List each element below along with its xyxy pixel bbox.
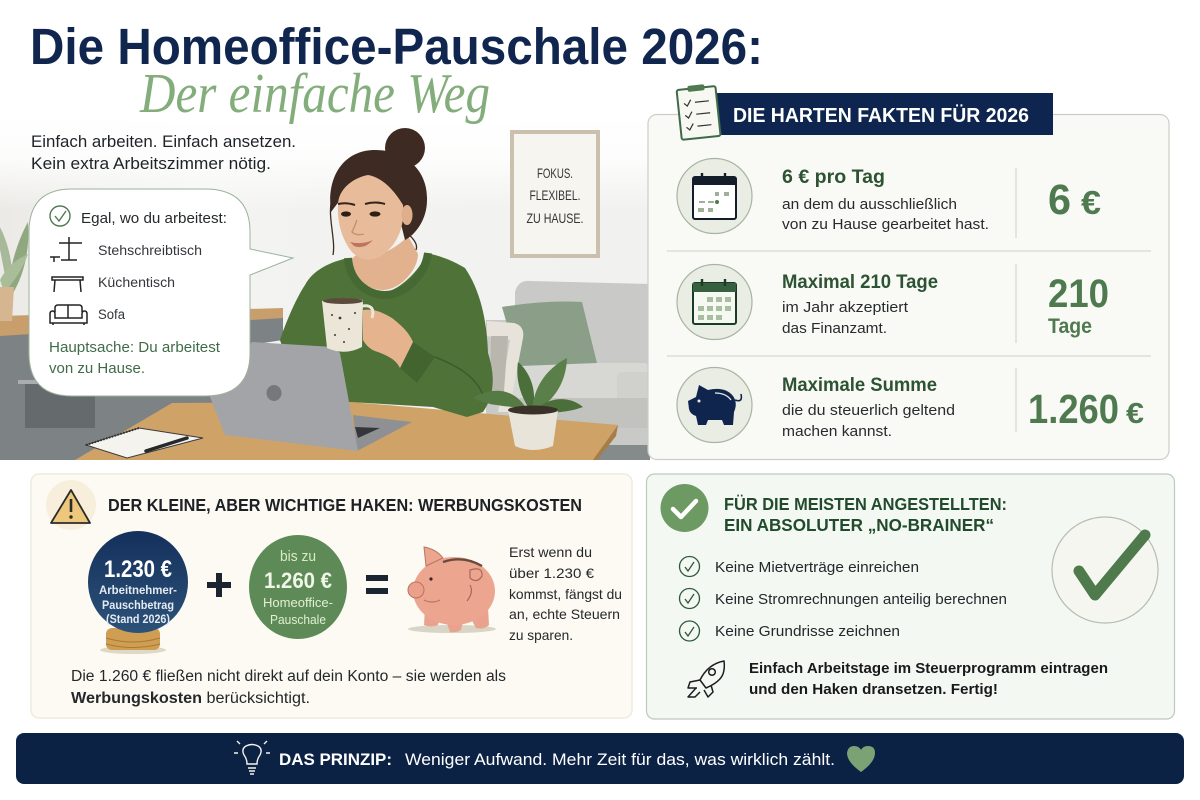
- text: when you save: zu sparen.: [509, 627, 573, 643]
- text: when you save: kommst, fängst du: [509, 586, 622, 602]
- value: 210 days: 210: [1048, 272, 1109, 316]
- value: 1.260 euro: 1.260: [1028, 386, 1119, 432]
- speech bubble: wherever you work: [29, 189, 293, 396]
- value: 210 days: Tage: [1048, 315, 1092, 338]
- call to action: Einfach Arbeitstage im Steuerprogramm eintragen: [749, 661, 1108, 677]
- footer banner: Weniger Aufwand. Mehr Zeit für das, was wirklich zählt.: [405, 751, 835, 769]
- row: maximum 210 days: [677, 264, 1109, 340]
- text: when you save: Erst wenn du: [509, 544, 592, 560]
- row: 6 euro per day: an dem du ausschließlich: [782, 196, 957, 213]
- chair: [487, 321, 523, 412]
- note: Werbungskosten berücksichtigt.: [71, 690, 310, 707]
- title: Die Homeoffice-Pauschale 2026:: [30, 18, 763, 75]
- circle: home office allowance: Homeoffice-: [263, 596, 333, 610]
- icon: large check mark: [1052, 517, 1158, 623]
- row: maximum sum: machen kannst.: [782, 423, 892, 440]
- icon: green calendar: [677, 264, 752, 340]
- bubble conclusion: Hauptsache: Du arbeitest: [49, 340, 220, 356]
- footer banner: DAS PRINZIP:: [279, 751, 392, 769]
- wall poster: FLEXIBEL.: [530, 187, 580, 203]
- subtitle: Der einfache Weg: [139, 63, 490, 125]
- note: [71, 668, 506, 707]
- collar: [348, 253, 428, 295]
- panel: hard facts: [648, 83, 1169, 460]
- circle: employee allowance: (Stand 2026): [106, 614, 170, 626]
- row: 6 euro per day: [677, 158, 1101, 234]
- icon: kitchen table: [52, 277, 83, 292]
- equals sign: [366, 578, 388, 591]
- neck: [350, 236, 418, 290]
- checklist: [680, 556, 1007, 641]
- circle: home office allowance: bis zu: [280, 549, 316, 565]
- row: 6 euro per day: von zu Hause gearbeitet hast.: [782, 216, 989, 233]
- wall poster: FOKUS.: [537, 165, 573, 181]
- text: when you save: [509, 544, 622, 643]
- icon: coins: [100, 628, 166, 654]
- text: when you save: an, echte Steuern: [509, 606, 620, 622]
- speech bubble: wherever you work: Egal, wo du arbeitest:: [81, 211, 227, 227]
- icon: pink piggy bank: [408, 547, 496, 633]
- hand and mug: [322, 298, 413, 368]
- hair: [330, 128, 427, 255]
- kitchen counter: [0, 308, 283, 460]
- icon: clipboard: [676, 83, 721, 140]
- call to action: [749, 661, 1108, 698]
- value: 6 euro: €: [1081, 184, 1101, 221]
- row: maximum sum: Maximale Summe: [782, 375, 937, 396]
- intro text: Kein extra Arbeitszimmer nötig.: [31, 155, 271, 173]
- icon: navy piggy bank: [677, 368, 752, 442]
- wall poster: ZU HAUSE.: [526, 210, 584, 226]
- intro text: [31, 133, 296, 173]
- row: 6 euro per day: 6 € pro Tag: [782, 167, 885, 188]
- icon: rocket: [688, 661, 724, 697]
- circle: home office allowance: 1.260 €: [264, 568, 332, 593]
- sweater: [280, 253, 493, 417]
- icon: sofa: [50, 305, 87, 325]
- row: maximum 210 days: Maximal 210 Tage: [782, 272, 938, 293]
- notebook and pen: [86, 428, 203, 458]
- icon: heart: [847, 746, 875, 772]
- value: 210 days: [1048, 272, 1109, 338]
- heading: EIN ABSOLUTER „NO-BRAINER“: [724, 515, 994, 535]
- bubble conclusion: [49, 340, 220, 377]
- circle: home office allowance: [249, 535, 347, 639]
- circle: employee allowance: Pauschbetrag: [102, 600, 174, 612]
- laptop: [210, 342, 412, 451]
- potted plant: [473, 358, 583, 450]
- illustration: woman working at home: [0, 115, 653, 460]
- panel: the catch: [31, 474, 632, 718]
- sofa: [486, 281, 653, 460]
- bubble conclusion: von zu Hause.: [49, 361, 145, 377]
- footer banner: [16, 733, 1184, 784]
- speech bubble: wherever you work: Küchentisch: [98, 275, 175, 290]
- icon: green check badge: [660, 484, 708, 532]
- heading: FÜR DIE MEISTEN ANGESTELLTEN:: [724, 494, 1007, 514]
- circle: home office allowance: Pauschale: [270, 613, 326, 627]
- checklist: Keine Grundrisse zeichnen: [715, 624, 900, 640]
- face: [338, 175, 412, 260]
- checklist: Keine Mietverträge einreichen: [715, 560, 919, 576]
- intro text: Einfach arbeiten. Einfach ansetzen.: [31, 133, 296, 151]
- speech bubble: wherever you work: Stehschreibtisch: [98, 243, 202, 258]
- plant on the counter: [0, 215, 28, 321]
- plus sign: [207, 573, 231, 597]
- panel: no-brainer: [646, 474, 1174, 719]
- speech bubble: wherever you work: Sofa: [98, 307, 125, 322]
- row: maximum sum: die du steuerlich geltend: [782, 402, 955, 419]
- circle: employee allowance: [88, 531, 188, 633]
- value: 6 euro: [1048, 176, 1101, 224]
- icon: check circle: [50, 206, 70, 226]
- icon: light bulb: [234, 741, 270, 774]
- heading banner: DIE HARTEN FAKTEN FÜR 2026: [733, 104, 1029, 127]
- heading: [724, 494, 1007, 535]
- circle: employee allowance: 1.230 €: [104, 556, 172, 583]
- row: maximum sum: [677, 368, 1144, 442]
- table: [75, 402, 618, 460]
- row: maximum 210 days: das Finanzamt.: [782, 320, 887, 337]
- icon: calendar: [677, 158, 752, 234]
- heading: DER KLEINE, ABER WICHTIGE HAKEN: WERBUNGSKOSTEN: [108, 495, 582, 515]
- value: 6 euro: 6: [1048, 176, 1071, 224]
- icon: standing desk: [50, 237, 82, 262]
- circle: employee allowance: Arbeitnehmer-: [99, 585, 177, 597]
- icon: warning: [46, 480, 96, 530]
- note: Die 1.260 € fließen nicht direkt auf dein Konto – sie werden als: [71, 668, 506, 685]
- call to action: und den Haken dransetzen. Fertig!: [749, 682, 998, 698]
- value: 1.260 euro: €: [1126, 398, 1144, 430]
- heading banner: [716, 93, 1053, 135]
- checklist: Keine Stromrechnungen anteilig berechnen: [715, 592, 1007, 608]
- row: maximum 210 days: im Jahr akzeptiert: [782, 299, 909, 316]
- wall poster: [510, 130, 600, 258]
- text: when you save: über 1.230 €: [509, 565, 594, 581]
